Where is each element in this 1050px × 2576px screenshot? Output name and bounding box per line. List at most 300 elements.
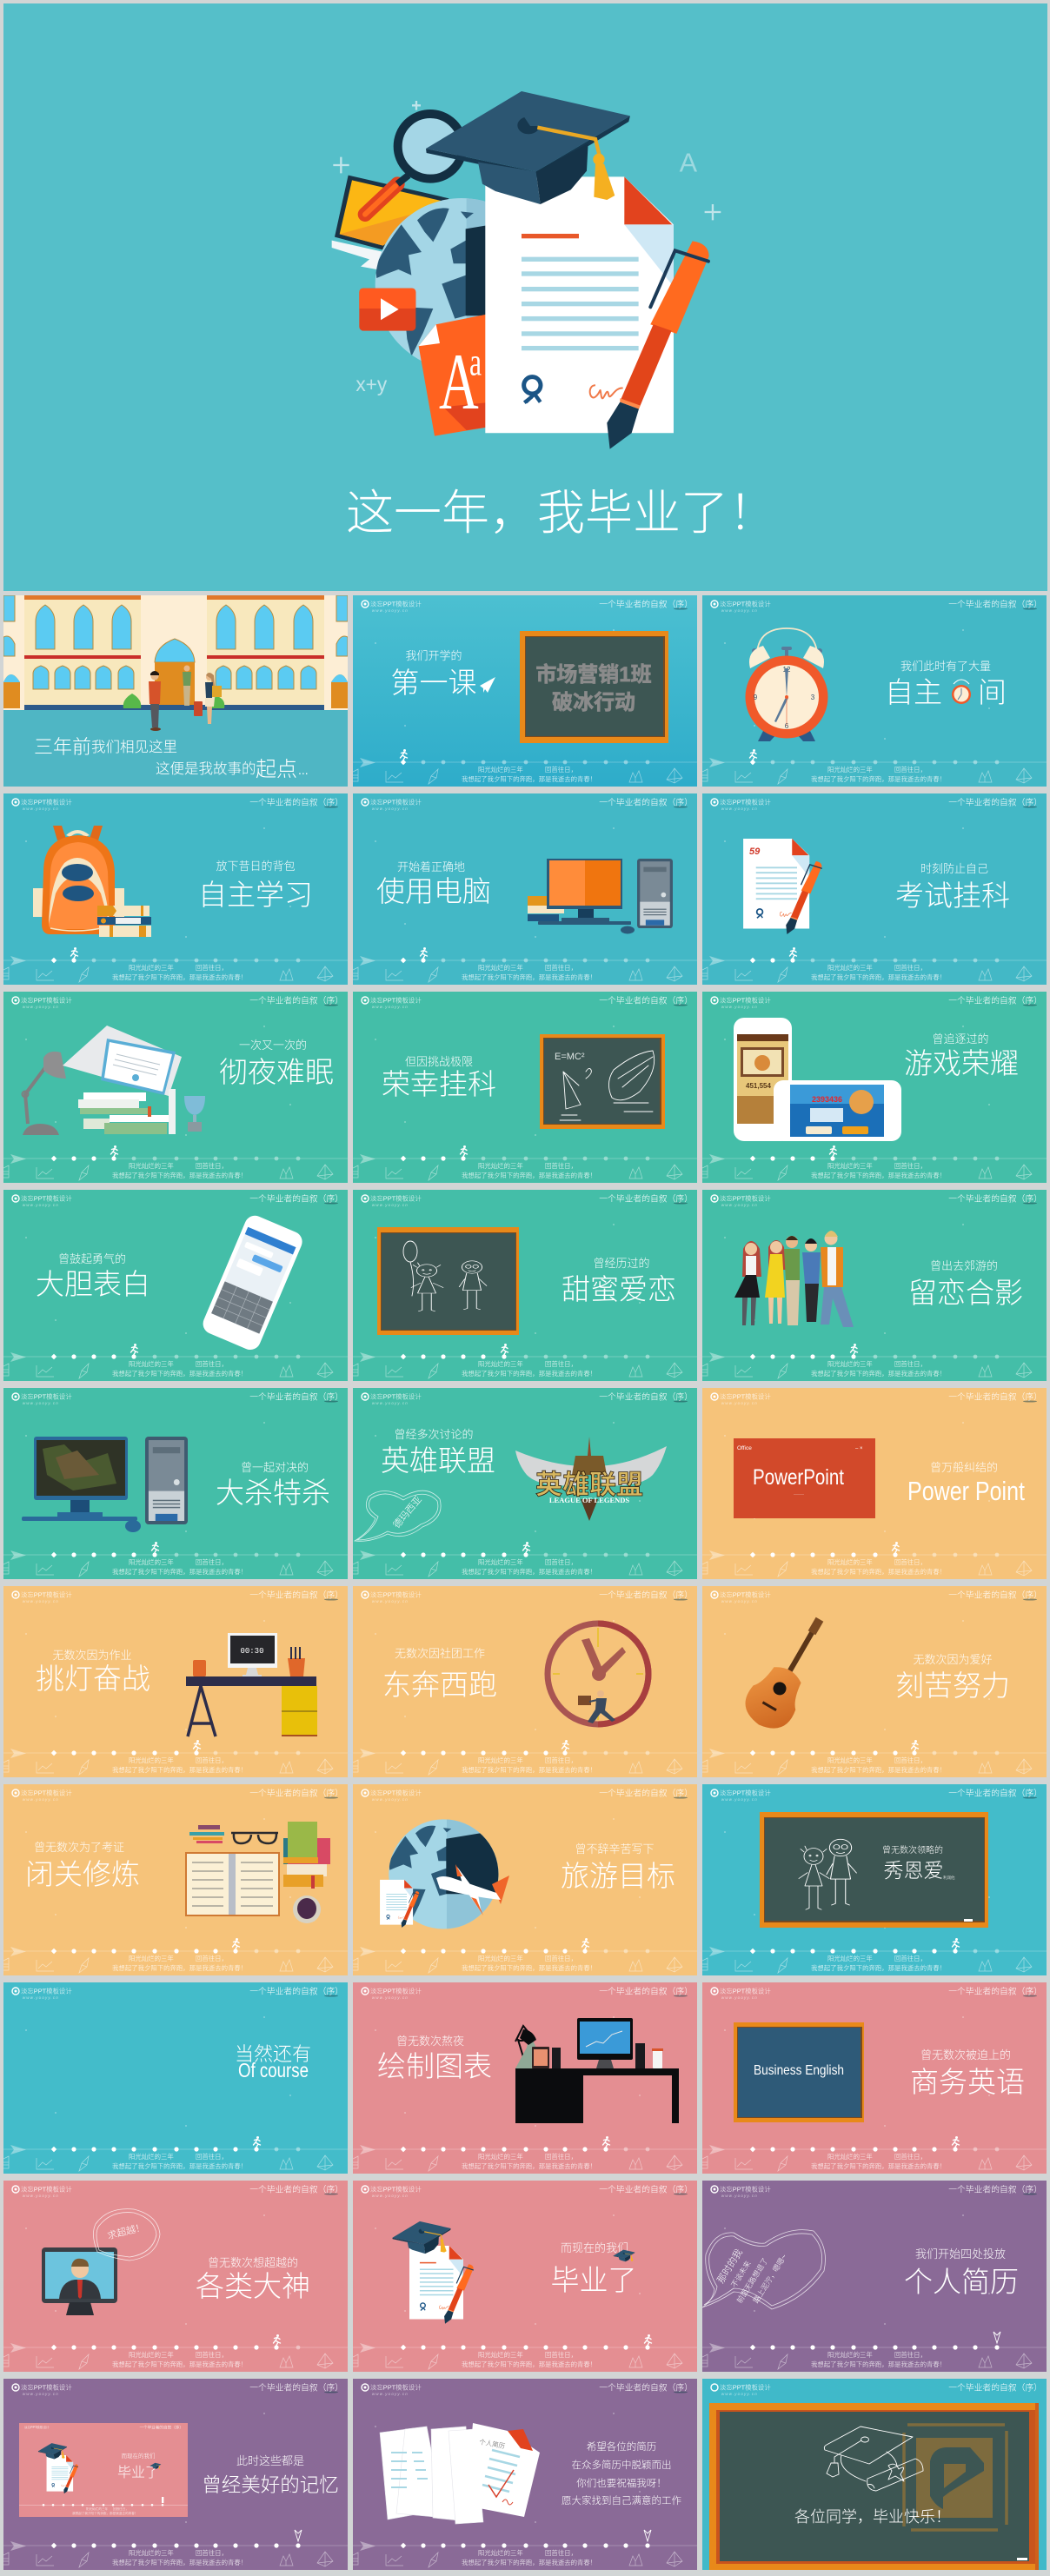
logo: 淡忘PPT模板设计 — [21, 1392, 72, 1401]
caption: 我想起了我夕阳下的奔跑，那是我逝去的青春！ — [462, 1964, 596, 1972]
caption: 阳光灿烂的三年 — [827, 1162, 873, 1170]
panel: 毕业了 — [353, 2181, 697, 2372]
caption: 我想起了我夕阳下的奔跑，那是我逝去的青春！ — [112, 1964, 247, 1972]
header: 一个毕业者的自叙（序） — [948, 2381, 1042, 2393]
heading: 毕业了 — [551, 2264, 636, 2296]
logo — [21, 996, 72, 1009]
subheading: 无数次因为作业 — [52, 1649, 132, 1662]
logo: 淡忘PPT模板设计 — [370, 600, 422, 608]
chalk drawing: balloon — [403, 1241, 417, 1296]
caption: 回首往日， — [196, 2351, 228, 2359]
timeline — [51, 1344, 137, 1359]
header: 一个毕业者的自叙（序） — [599, 598, 693, 610]
icon: vertical phone — [734, 1018, 792, 1141]
icon: mini clock — [952, 680, 971, 704]
subheading: 一次又一次的 — [239, 1039, 307, 1052]
caption — [112, 964, 247, 981]
timeline — [750, 1938, 960, 1954]
icon: backpack — [33, 826, 124, 934]
heading: 英雄联盟 — [381, 1444, 495, 1477]
logo — [720, 1392, 771, 1405]
icon: books — [97, 906, 151, 937]
caption: 阳光灿烂的三年 — [129, 1360, 174, 1368]
caption — [811, 766, 946, 783]
header: 一个毕业者的自叙（序） — [948, 1391, 1042, 1403]
board small note: 利润他 — [943, 1875, 955, 1881]
text block: story start: ... — [298, 763, 309, 777]
caption — [112, 2549, 247, 2566]
caption: 阳光灿烂的三年 — [827, 1558, 873, 1566]
logo — [720, 996, 771, 1009]
caption: 我想起了我夕阳下的奔跑，那是我逝去的青春！ — [112, 973, 247, 981]
panel: 自主学习 — [3, 793, 348, 985]
logo: www.yooyy.cn — [372, 1995, 409, 2000]
icon: paper plane — [480, 677, 495, 693]
panel: 各类大神 — [3, 2181, 348, 2372]
panel: 商务英语 — [702, 1982, 1047, 2174]
icon: magnifying glass — [365, 114, 462, 215]
header: 一个毕业者的自叙（序） — [948, 1985, 1042, 1997]
logo — [720, 1194, 771, 1207]
text block: wishes — [562, 2440, 681, 2506]
caption: 回首往日， — [545, 2153, 577, 2161]
illustration: study desk: 00:30 — [240, 1647, 264, 1656]
logo: 淡忘PPT模板设计 — [21, 996, 72, 1005]
blackboard: Business English — [734, 2022, 864, 2122]
timeline — [750, 2136, 960, 2152]
caption — [462, 1756, 596, 1774]
logo: www.yooyy.cn — [721, 1995, 758, 2000]
caption: 我想起了我夕阳下的奔跑，那是我逝去的青春！ — [462, 2559, 596, 2566]
logo: www.yooyy.cn — [372, 1401, 409, 1405]
logo: 淡忘PPT模板设计 — [720, 1789, 771, 1797]
caption — [112, 2153, 247, 2170]
caption — [462, 1360, 596, 1378]
heading: 荣幸挂科 — [382, 1068, 496, 1100]
subheading: 曾一起对决的 — [241, 1461, 309, 1474]
header: 一个毕业者的自叙（序） — [249, 2381, 343, 2393]
timeline — [401, 1740, 568, 1756]
mini slide thumbnail — [19, 2423, 188, 2517]
timeline — [750, 1145, 836, 1161]
panel: 东奔西跑 — [353, 1586, 697, 1777]
logo: www.yooyy.cn — [721, 2194, 758, 2198]
caption: 阳光灿烂的三年 — [129, 964, 174, 972]
panel: 荣幸挂科 — [353, 992, 697, 1183]
subheading: 我们开始四处投放 — [915, 2247, 1006, 2261]
caption: 我想起了我夕阳下的奔跑，那是我逝去的青春！ — [811, 2162, 946, 2170]
caption — [462, 2549, 596, 2566]
caption: 回首往日， — [894, 1558, 927, 1566]
heading: 刻苦努力 — [895, 1670, 1010, 1702]
logo: 淡忘PPT模板设计 — [21, 2185, 72, 2194]
caption: 阳光灿烂的三年 — [827, 1360, 873, 1368]
caption: 我想起了我夕阳下的奔跑，那是我逝去的青春！ — [811, 775, 946, 783]
logo: www.yooyy.cn — [23, 1995, 59, 2000]
caption: 回首往日， — [196, 1756, 228, 1764]
icon: certificate and pen — [485, 176, 709, 449]
icon: fan of resumes — [380, 2423, 540, 2524]
speech bubble — [93, 2209, 160, 2261]
logo: www.yooyy.cn — [23, 1005, 59, 1009]
icon: alarm clock: 12 — [783, 666, 791, 674]
icon: alarm clock: 6 — [785, 722, 789, 730]
logo: 淡忘PPT模板设计 — [720, 1194, 771, 1203]
icon: books — [528, 896, 564, 921]
timeline — [401, 1938, 589, 1954]
icon: open book — [186, 1853, 279, 1915]
icon: airplane — [436, 1864, 509, 1915]
text block: story start: 这便是我故事的 — [156, 760, 256, 777]
icon: alarm clock: 3 — [811, 694, 815, 701]
mini slide thumbnail: 毕业了 — [117, 2465, 159, 2480]
logo: 淡忘PPT模板设计 — [21, 2383, 72, 2392]
logo: www.yooyy.cn — [23, 1797, 59, 1802]
speech bubble: 前面无路想退了 — [734, 2256, 769, 2305]
icon: horizontal phone: 2393436 — [812, 1095, 842, 1104]
logo: www.yooyy.cn — [721, 1599, 758, 1603]
timeline — [51, 2530, 302, 2548]
caption: 阳光灿烂的三年 — [478, 1955, 523, 1962]
icon: smartphone chat — [200, 1212, 305, 1353]
timeline — [750, 1740, 918, 1756]
panel: 个人简历 — [702, 2181, 1047, 2372]
caption: 阳光灿烂的三年 — [129, 1162, 174, 1170]
speech bubble: 德玛西亚 — [390, 1493, 424, 1530]
timeline — [750, 2332, 1000, 2350]
panel: 英雄联盟 — [353, 1388, 697, 1579]
caption: 回首往日， — [545, 766, 577, 773]
caption: 回首往日， — [196, 1558, 228, 1566]
text block: wishes: 在众多简历中脱颖而出 — [572, 2459, 671, 2471]
subheading: 我们此时有了大量 — [900, 660, 991, 673]
icon: desktop computer — [538, 859, 673, 933]
caption: 回首往日， — [196, 2549, 228, 2557]
icon: orange header bar — [522, 234, 579, 238]
caption: 我想起了我夕阳下的奔跑，那是我逝去的青春！ — [811, 2360, 946, 2368]
logo — [370, 798, 422, 811]
blackboard: 破冰行动 — [552, 691, 635, 714]
logo: www.yooyy.cn — [23, 2392, 59, 2396]
panel: hero cover — [3, 3, 1047, 591]
logo — [21, 2185, 72, 2198]
logo — [370, 600, 422, 613]
logo — [21, 798, 72, 811]
header: 一个毕业者的自叙（序） — [249, 1589, 343, 1601]
logo — [370, 996, 422, 1009]
panel: 闭关修炼 — [3, 1784, 348, 1975]
icon: certificate — [101, 1039, 176, 1095]
logo: www.yooyy.cn — [721, 807, 758, 811]
timeline — [51, 1938, 239, 1954]
logo: 淡忘PPT模板设计 — [720, 1590, 771, 1599]
caption: 回首往日， — [196, 964, 228, 972]
blackboard: farewell — [709, 2403, 1039, 2570]
caption — [462, 1162, 596, 1179]
timeline — [51, 2136, 260, 2152]
panel: 自主时间 — [702, 595, 1047, 787]
icon: failing exam paper — [743, 839, 821, 934]
icon: video play — [359, 289, 415, 331]
timeline — [401, 2530, 651, 2548]
caption: 我想起了我夕阳下的奔跑，那是我逝去的青春！ — [112, 1172, 247, 1179]
caption: 阳光灿烂的三年 — [478, 1162, 523, 1170]
timeline — [400, 749, 407, 765]
caption: 阳光灿烂的三年 — [129, 2153, 174, 2161]
icon: stacked books — [283, 1822, 330, 1889]
header: 一个毕业者的自叙（序） — [948, 1787, 1042, 1799]
caption: 回首往日， — [196, 2153, 228, 2161]
logo: 淡忘PPT模板设计 — [370, 1987, 422, 1995]
logo: 淡忘PPT模板设计 — [720, 600, 771, 608]
watermark P — [904, 2425, 1007, 2530]
caption — [112, 1162, 247, 1179]
logo: 淡忘PPT模板设计 — [720, 1392, 771, 1401]
caption: 我想起了我夕阳下的奔跑，那是我逝去的青春！ — [462, 1766, 596, 1774]
caption: 阳光灿烂的三年 — [827, 1955, 873, 1962]
header: 一个毕业者的自叙（序） — [599, 2183, 693, 2195]
PowerPoint splash: Office — [737, 1445, 752, 1451]
panel: 第一课 — [353, 595, 697, 787]
caption: 我想起了我夕阳下的奔跑，那是我逝去的青春！ — [462, 2162, 596, 2170]
title: 这一年，我毕业了！ — [346, 486, 776, 540]
heading: 考试挂科 — [895, 880, 1010, 912]
speech bubble: 路上泥泞，嗯嗯~ — [751, 2253, 788, 2305]
subheading: 曾经历过的 — [593, 1257, 650, 1270]
caption: 阳光灿烂的三年 — [478, 2549, 523, 2557]
logo: 淡忘PPT模板设计 — [370, 798, 422, 807]
subheading: 曾万般纠结的 — [930, 1461, 998, 1474]
caption: 我想起了我夕阳下的奔跑，那是我逝去的青春！ — [462, 973, 596, 981]
caption: 回首往日， — [894, 1756, 927, 1764]
panel: 甜蜜爱恋 — [353, 1190, 697, 1381]
caption: 回首往日， — [196, 1955, 228, 1962]
header: 一个毕业者的自叙（序） — [249, 1985, 343, 1997]
game logo: LEAGUE OF LEGENDS — [549, 1496, 629, 1504]
text: letter A: A — [680, 148, 698, 177]
header: 一个毕业者的自叙（序） — [948, 1589, 1042, 1601]
caption: 我想起了我夕阳下的奔跑，那是我逝去的青春！ — [462, 1370, 596, 1378]
timeline — [401, 1145, 468, 1161]
panel: Power Point — [702, 1388, 1047, 1579]
panel: 旅游目标 — [353, 1784, 697, 1975]
timeline — [51, 1542, 158, 1557]
resume: front sheet — [466, 2423, 540, 2517]
logo: www.yooyy.cn — [721, 1005, 758, 1009]
panel: 当然还有 — [3, 1982, 348, 2174]
game logo — [515, 1437, 667, 1521]
icon: monitor — [332, 176, 449, 269]
subheading: 曾鼓起勇气的 — [58, 1252, 126, 1265]
caption: 回首往日， — [545, 1360, 577, 1368]
logo: 淡忘PPT模板设计 — [370, 996, 422, 1005]
heading: 挑灯奋战 — [36, 1663, 150, 1695]
icon: running clock — [548, 1623, 648, 1724]
icon: certificate with cap — [392, 2221, 474, 2324]
caption — [462, 2351, 596, 2368]
caption — [811, 1955, 946, 1972]
logo: 淡忘PPT模板设计 — [370, 2185, 422, 2194]
header: 一个毕业者的自叙（序） — [599, 2381, 693, 2393]
caption: 回首往日， — [894, 1955, 927, 1962]
chalk drawing: graduation cap and diploma — [824, 2427, 923, 2491]
logo: 淡忘PPT模板设计 — [370, 2383, 422, 2392]
icon: coffee — [293, 1895, 321, 1923]
icon: orange font document — [419, 315, 487, 436]
mini slide thumbnail: 我想起了我夕阳下的奔跑，那是我逝去的青春！ — [72, 2511, 137, 2515]
board subheading: 曾无数次领略的 — [882, 1844, 943, 1856]
PowerPoint splash: ······ — [794, 1492, 804, 1497]
logo — [370, 1987, 422, 2000]
logo — [21, 1392, 72, 1405]
timeline — [51, 1740, 200, 1756]
logo — [21, 1194, 72, 1207]
icon: certificate — [380, 1880, 419, 1928]
board heading: 秀恩爱 — [883, 1859, 944, 1882]
panel: 刻苦努力 — [702, 1586, 1047, 1777]
blackboard: love couple — [377, 1227, 519, 1335]
logo: 淡忘PPT模板设计 — [720, 1987, 771, 1995]
logo: www.yooyy.cn — [721, 608, 758, 613]
caption: 阳光灿烂的三年 — [827, 964, 873, 972]
PowerPoint splash: – × — [855, 1446, 863, 1451]
header: 一个毕业者的自叙（序） — [599, 1391, 693, 1403]
illustration: group of friends — [734, 1231, 854, 1327]
resume: front sheet: 个人简历 — [479, 2437, 506, 2450]
icon: alarm clock — [746, 628, 827, 741]
chalk drawing: boy — [827, 1839, 856, 1905]
caption: 回首往日， — [894, 766, 927, 773]
panel: 秀恩爱 — [702, 1784, 1047, 1975]
header: 一个毕业者的自叙（序） — [249, 2183, 343, 2195]
heading: 旅游目标 — [561, 1860, 675, 1892]
icon: students — [149, 666, 222, 731]
logo — [370, 2185, 422, 2198]
caption — [112, 1756, 247, 1774]
subheading: 而现在的我们 — [561, 2241, 628, 2254]
heading: 商务英语 — [910, 2066, 1025, 2098]
subheading: 开始着正确地 — [397, 860, 465, 873]
text block: story start: 起点 — [256, 758, 297, 781]
heading: 彻夜难眠 — [219, 1056, 334, 1088]
caption: 我想起了我夕阳下的奔跑，那是我逝去的青春！ — [811, 1172, 946, 1179]
subheading: 曾追逐过的 — [932, 1032, 989, 1046]
logo: www.yooyy.cn — [721, 1401, 758, 1405]
panel: 留恋合影 — [702, 1190, 1047, 1381]
header: 一个毕业者的自叙（序） — [249, 1192, 343, 1205]
header: 一个毕业者的自叙（序） — [948, 1192, 1042, 1205]
logo: 淡忘PPT模板设计 — [370, 1789, 422, 1797]
blackboard: formulas — [540, 1034, 665, 1129]
logo: www.yooyy.cn — [372, 1797, 409, 1802]
logo — [720, 1987, 771, 2000]
header: 一个毕业者的自叙（序） — [599, 1985, 693, 1997]
mini slide thumbnail: 淡忘PPT模板设计 — [24, 2425, 50, 2429]
logo: 淡忘PPT模板设计 — [370, 1392, 422, 1401]
subheading: 曾无数次想超越的 — [208, 2256, 298, 2269]
caption — [811, 964, 946, 981]
caption: 我想起了我夕阳下的奔跑，那是我逝去的青春！ — [811, 1964, 946, 1972]
caption: 回首往日， — [894, 964, 927, 972]
blackboard: Business English: Business English — [754, 2063, 844, 2078]
caption: 阳光灿烂的三年 — [478, 1360, 523, 1368]
subheading: 我们开学的 — [405, 649, 462, 662]
subheading: 时刻防止自己 — [920, 862, 988, 875]
icon: graduation cap — [426, 91, 630, 204]
header: 一个毕业者的自叙（序） — [249, 994, 343, 1006]
caption — [811, 1360, 946, 1378]
caption: 阳光灿烂的三年 — [129, 1955, 174, 1962]
caption: 阳光灿烂的三年 — [827, 2351, 873, 2359]
chalk drawing: girl — [799, 1846, 829, 1909]
logo: www.yooyy.cn — [372, 2194, 409, 2198]
chalk drawing: girl — [411, 1263, 443, 1311]
panel: 希望各位 — [353, 2379, 697, 2570]
caption — [112, 1360, 247, 1378]
header: 一个毕业者的自叙（序） — [249, 1391, 343, 1403]
heading: 个人简历 — [904, 2266, 1019, 2298]
heading: 各类大神 — [196, 2270, 310, 2302]
heading: 使用电脑 — [376, 875, 491, 907]
caption — [112, 2351, 247, 2368]
logo: www.yooyy.cn — [23, 2194, 59, 2198]
illustration: study desk — [186, 1633, 317, 1736]
logo — [370, 1590, 422, 1603]
speech bubble: 那时的我 — [714, 2247, 745, 2286]
caption: 我想起了我夕阳下的奔跑，那是我逝去的青春！ — [811, 1370, 946, 1378]
caption: 我想起了我夕阳下的奔跑，那是我逝去的青春！ — [112, 2559, 247, 2566]
caption: 我想起了我夕阳下的奔跑，那是我逝去的青春！ — [112, 2162, 247, 2170]
caption: 我想起了我夕阳下的奔跑，那是我逝去的青春！ — [811, 1568, 946, 1576]
chalk drawing: boy — [459, 1261, 487, 1310]
PowerPoint splash — [734, 1438, 875, 1518]
illustration: desk with charts — [515, 2018, 679, 2123]
logo: www.yooyy.cn — [23, 1401, 59, 1405]
icon: books — [78, 1089, 176, 1134]
header: 一个毕业者的自叙（序） — [599, 1787, 693, 1799]
caption: 回首往日， — [894, 1360, 927, 1368]
caption: 我想起了我夕阳下的奔跑，那是我逝去的青春！ — [462, 1172, 596, 1179]
blackboard: formulas: E=MC² — [555, 1052, 585, 1062]
closing message: 各位同学，毕业快乐！ — [794, 2508, 951, 2526]
text block: story start — [34, 736, 309, 781]
subheading: 曾不辞辛苦写下 — [575, 1842, 655, 1856]
caption: 阳光灿烂的三年 — [827, 2153, 873, 2161]
icon: horizontal phone — [774, 1080, 901, 1141]
speech bubble — [702, 2230, 826, 2312]
logo — [720, 798, 771, 811]
logo — [720, 1789, 771, 1802]
logo — [370, 1392, 422, 1405]
timeline — [401, 1542, 530, 1557]
panel: 游戏荣耀 — [702, 992, 1047, 1183]
logo — [720, 2185, 771, 2198]
caption: 回首往日， — [545, 2549, 577, 2557]
caption — [462, 1558, 596, 1576]
text block: wishes: 希望各位的简历 — [587, 2440, 656, 2453]
logo: 淡忘PPT模板设计 — [720, 2383, 771, 2392]
text: formula: x+y — [356, 373, 388, 395]
logo: www.yooyy.cn — [721, 1797, 758, 1802]
text: score: 59 — [749, 846, 761, 857]
mini slide thumbnail: 而现在的我们 — [122, 2452, 155, 2460]
heading: 间 — [978, 676, 1007, 708]
logo: www.yooyy.cn — [23, 1599, 59, 1603]
logo — [720, 600, 771, 613]
icon: pencils — [189, 1825, 224, 1843]
heading: 游戏荣耀 — [904, 1047, 1019, 1079]
icon: guitar — [737, 1607, 841, 1737]
